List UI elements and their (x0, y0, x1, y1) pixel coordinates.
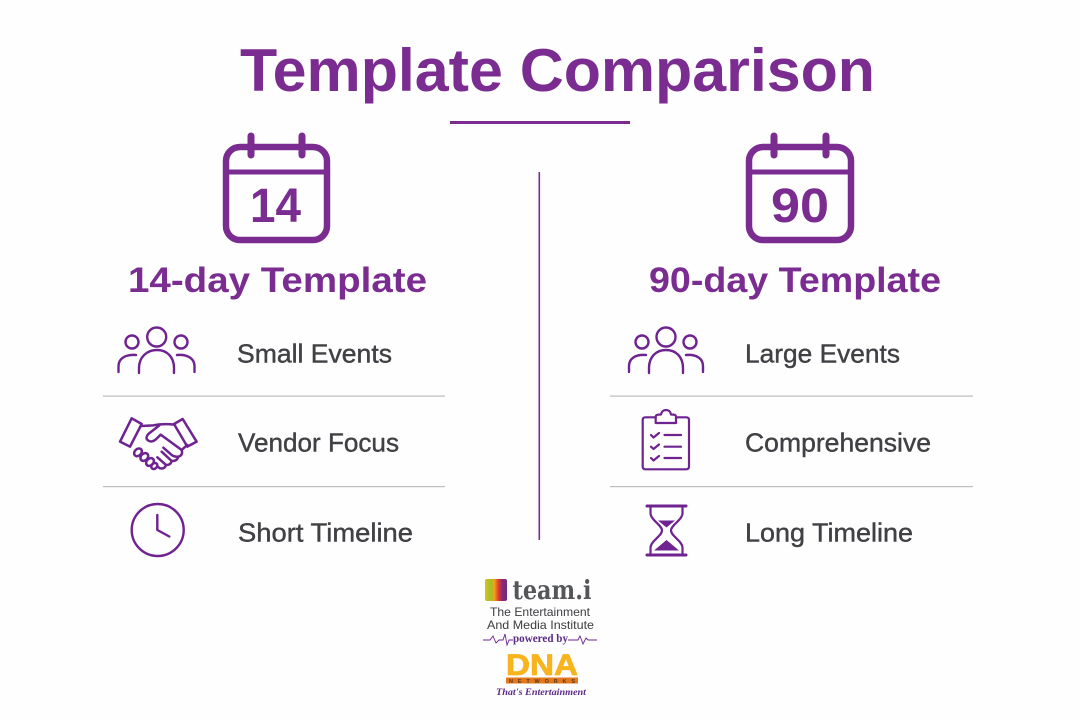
label: Short Timeline: Short Timeline (238, 518, 413, 548)
label: Large Events: Large Events (745, 338, 900, 368)
logo: team.i powered by DNA: That's Entertainment (496, 688, 586, 698)
icon: calendar 14: 14 (250, 180, 301, 233)
icon: calendar 14 (226, 136, 327, 240)
logo: team.i powered by DNA: powered by (513, 633, 568, 645)
logo: team.i powered by DNA: The Entertainment (490, 605, 591, 619)
icon: people (118, 328, 194, 373)
logo: team.i powered by DNA: NETWORKS (509, 679, 575, 685)
label: Comprehensive: Comprehensive (745, 428, 931, 458)
label: Small Events: Small Events (237, 338, 392, 368)
logo: team.i powered by DNA: DNA (506, 649, 578, 682)
label: Long Timeline: Long Timeline (745, 518, 913, 548)
heading: 90-day Template: 90-day Template (649, 261, 941, 300)
title: Template Comparison (240, 37, 875, 104)
icon: handshake (120, 418, 197, 470)
heading: 14-day Template: 14-day Template (128, 261, 427, 300)
logo: team.i powered by DNA (483, 576, 597, 698)
logo: team.i powered by DNA: And Media Institute (487, 618, 594, 632)
icon: clock (132, 504, 184, 556)
panel: 90-day template (610, 136, 973, 555)
icon: hourglass (647, 506, 686, 555)
icon: clipboard checklist (643, 410, 689, 469)
icon: people (629, 328, 703, 373)
label: Vendor Focus: Vendor Focus (238, 428, 399, 458)
panel: 14-day template (103, 136, 445, 556)
icon: calendar 90 (749, 136, 851, 240)
logo: team.i powered by DNA: team.i (512, 576, 592, 606)
icon: calendar 90: 90 (771, 180, 829, 233)
